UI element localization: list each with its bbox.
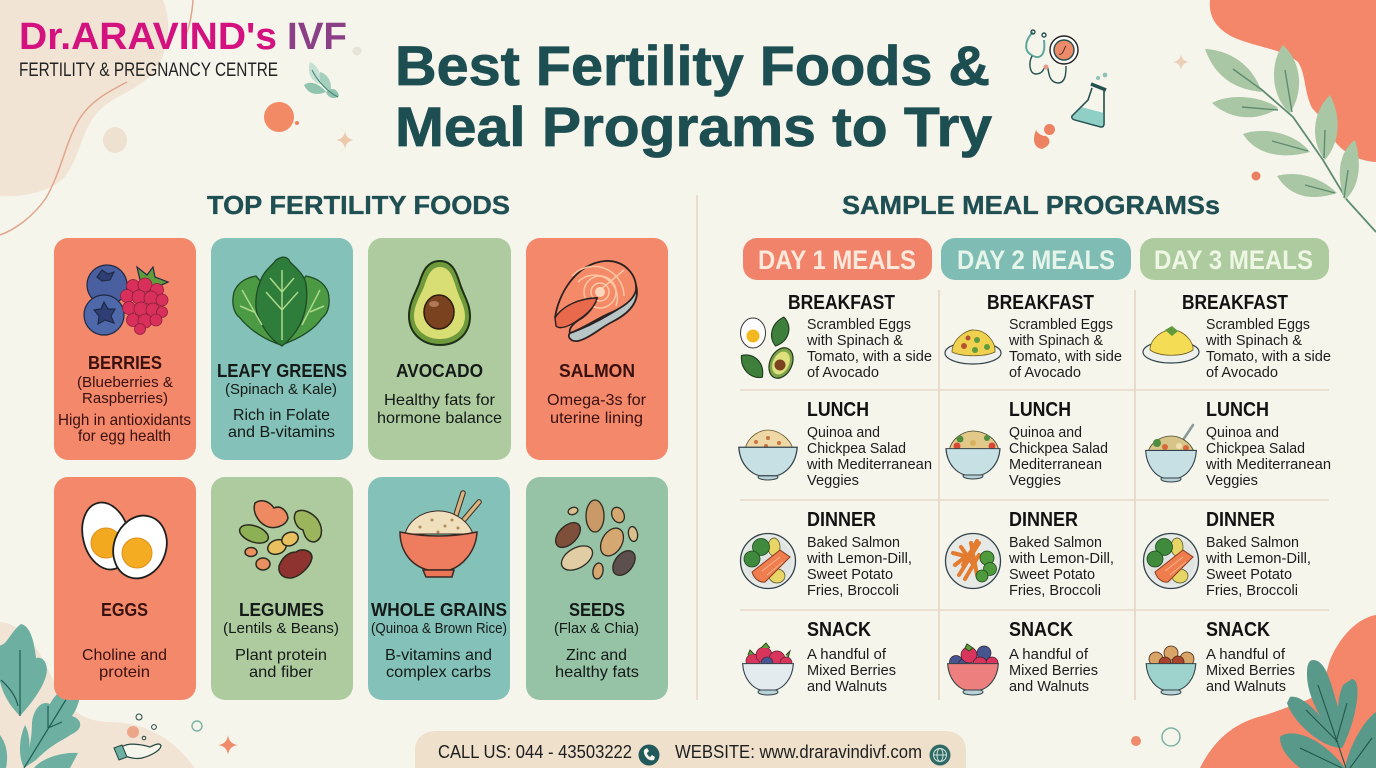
day 2 breakfast: of Avocado bbox=[1009, 364, 1081, 381]
day 3 dinner: DINNER bbox=[1206, 509, 1275, 531]
panel: eggs: EGGS bbox=[101, 599, 148, 620]
day 3 lunch: Chickpea Salad bbox=[1206, 440, 1305, 457]
day 1 dinner: with Lemon-Dill, bbox=[806, 550, 912, 567]
icon: phone bbox=[638, 744, 660, 766]
logo: IVF bbox=[287, 16, 347, 58]
footer contact bar bbox=[415, 731, 966, 768]
day 1 header bbox=[743, 238, 932, 280]
day 2 snack: A handful of bbox=[1009, 646, 1089, 663]
day 2 snack: SNACK bbox=[1009, 619, 1073, 641]
day 2 dinner: with Lemon-Dill, bbox=[1008, 550, 1114, 567]
title: Meal Programs to Try bbox=[395, 95, 992, 158]
day 3 dinner: Fries, Broccoli bbox=[1206, 582, 1298, 599]
day 2 dinner: Fries, Broccoli bbox=[1009, 582, 1101, 599]
panel: eggs bbox=[54, 477, 196, 700]
day 1 lunch: Quinoa and bbox=[807, 424, 880, 441]
logo: FERTILITY & PREGNANCY CENTRE bbox=[19, 60, 278, 81]
panel: berries: (Blueberries & bbox=[77, 374, 173, 391]
day 2 lunch: Quinoa and bbox=[1009, 424, 1082, 441]
day 2 breakfast: BREAKFAST bbox=[987, 292, 1094, 314]
day 1 breakfast: of Avocado bbox=[807, 364, 879, 381]
panel: leafy greens: (Spinach & Kale) bbox=[225, 381, 337, 398]
day 1 dinner: Fries, Broccoli bbox=[807, 582, 899, 599]
day 2 header bbox=[941, 238, 1131, 280]
day 2 lunch: LUNCH bbox=[1009, 399, 1071, 421]
icon: scrambled eggs plate bbox=[1143, 326, 1199, 363]
footer contact bar: WEBSITE: www.draravindivf.com bbox=[675, 742, 922, 762]
title: Best Fertility Foods & bbox=[395, 34, 990, 97]
icon: chickpea salad bowl bbox=[946, 431, 1000, 479]
panel: eggs: protein bbox=[99, 664, 150, 681]
panel: berries: Raspberries) bbox=[82, 390, 168, 407]
heading: sample meal programs: SAMPLE MEAL PROGRAMSs bbox=[842, 190, 1220, 220]
icon: berries bbox=[84, 265, 168, 335]
day 1 dinner: DINNER bbox=[807, 509, 876, 531]
icon: berry bowl bbox=[743, 643, 793, 695]
panel: avocado: hormone balance bbox=[377, 410, 502, 427]
day 2 breakfast: Scrambled Eggs bbox=[1009, 316, 1113, 333]
panel: berries bbox=[54, 238, 196, 460]
logo: Dr.ARAVIND's bbox=[19, 16, 277, 58]
day 3 breakfast: of Avocado bbox=[1206, 364, 1278, 381]
day 2 breakfast: with Spinach & bbox=[1008, 332, 1103, 349]
day 1 breakfast: Tomato, with a side bbox=[807, 348, 932, 365]
icon: coral fruit shapes bbox=[1034, 124, 1055, 149]
day 2 breakfast bbox=[945, 292, 1122, 381]
day 2 snack: and Walnuts bbox=[1009, 678, 1089, 695]
panel: avocado: Healthy fats for bbox=[384, 392, 496, 409]
day 2 header: DAY 2 MEALS bbox=[957, 245, 1115, 275]
day 2 dinner: Sweet Potato bbox=[1009, 566, 1095, 583]
icon: mixed berries red bowl bbox=[948, 644, 998, 695]
day 1 lunch: LUNCH bbox=[807, 399, 869, 421]
day 3 snack: A handful of bbox=[1206, 646, 1286, 663]
day 1 breakfast bbox=[736, 292, 932, 383]
panel: seeds bbox=[526, 477, 668, 700]
panel: salmon bbox=[526, 238, 668, 460]
day 3 snack: Mixed Berries bbox=[1206, 662, 1295, 679]
icon: boiled eggs bbox=[75, 497, 175, 586]
day 1 lunch bbox=[739, 399, 932, 489]
day 3 lunch: with Mediterranean bbox=[1205, 456, 1331, 473]
day 3 header bbox=[1140, 238, 1329, 280]
section divider bbox=[696, 195, 698, 700]
day 3 dinner: with Lemon-Dill, bbox=[1205, 550, 1311, 567]
icon: salmon steak bbox=[555, 261, 637, 341]
day 2 lunch: Mediterranean bbox=[1009, 456, 1102, 473]
panel: seeds: healthy fats bbox=[555, 664, 639, 681]
icon: sweet potato fries plate bbox=[946, 534, 1000, 588]
panel: berries: High in antioxidants bbox=[58, 412, 191, 429]
panel: seeds: (Flax & Chia) bbox=[554, 620, 639, 637]
panel: salmon: SALMON bbox=[559, 360, 635, 381]
panel: berries: for egg health bbox=[78, 428, 171, 445]
icon: seeds bbox=[551, 500, 640, 580]
day 3 header: DAY 3 MEALS bbox=[1154, 245, 1313, 275]
panel: legumes: LEGUMES bbox=[239, 599, 324, 620]
icon: vegetable scramble plate bbox=[945, 330, 1001, 364]
icon: rice bowl bbox=[400, 493, 479, 577]
panel: whole grains: complex carbs bbox=[386, 664, 491, 681]
day 2 lunch bbox=[946, 399, 1108, 489]
icon: egg, spinach and avocado bbox=[736, 315, 798, 383]
panel: salmon: uterine lining bbox=[550, 410, 643, 427]
panel: leafy greens bbox=[211, 238, 353, 460]
day 1 lunch: Chickpea Salad bbox=[807, 440, 906, 457]
panel: avocado: AVOCADO bbox=[396, 360, 483, 381]
panel: seeds: SEEDS bbox=[569, 599, 625, 620]
icon: spinach bbox=[233, 257, 329, 346]
day 1 dinner: Baked Salmon bbox=[807, 534, 900, 551]
icon: salmon plate bbox=[740, 534, 796, 588]
icon: quinoa bowl bbox=[739, 430, 797, 480]
icon: avocado bbox=[409, 261, 470, 345]
panel: legumes: and fiber bbox=[249, 664, 314, 681]
day 3 lunch: LUNCH bbox=[1206, 399, 1269, 421]
day 1 breakfast: with Spinach & bbox=[806, 332, 903, 349]
day 3 snack: SNACK bbox=[1206, 619, 1270, 641]
day 3 breakfast: with Spinach & bbox=[1205, 332, 1302, 349]
day 2 lunch: Chickpea Salad bbox=[1009, 440, 1108, 457]
icon: legumes bbox=[237, 501, 321, 578]
panel: whole grains: B-vitamins and bbox=[385, 647, 492, 664]
title bbox=[395, 34, 992, 158]
icon: salad bowl with spoon bbox=[1146, 425, 1196, 482]
day 3 breakfast: Tomato, with a side bbox=[1206, 348, 1331, 365]
day 2 dinner bbox=[946, 509, 1114, 599]
day 3 lunch bbox=[1146, 399, 1331, 489]
icon: flask bbox=[1072, 73, 1107, 127]
logo bbox=[19, 16, 347, 81]
decoration: bottom-left blob and plant bbox=[0, 622, 238, 768]
icon: salmon plate bbox=[1144, 534, 1198, 588]
day 2 lunch: Veggies bbox=[1009, 472, 1061, 489]
day 3 dinner bbox=[1144, 509, 1311, 599]
panel: whole grains bbox=[368, 477, 510, 700]
day 3 breakfast: BREAKFAST bbox=[1182, 292, 1288, 314]
day 3 breakfast: Scrambled Eggs bbox=[1206, 316, 1310, 333]
panel: avocado bbox=[368, 238, 511, 460]
panel: berries: BERRIES bbox=[88, 352, 162, 373]
icon: globe bbox=[930, 744, 950, 766]
day 3 breakfast bbox=[1143, 292, 1331, 381]
day 3 snack: and Walnuts bbox=[1206, 678, 1286, 695]
day 3 snack bbox=[1146, 619, 1295, 695]
panel: salmon: Omega-3s for bbox=[547, 392, 647, 409]
panel: leafy greens: LEAFY GREENS bbox=[217, 360, 347, 381]
panel: legumes: (Lentils & Beans) bbox=[223, 620, 339, 637]
day 3 lunch: Quinoa and bbox=[1206, 424, 1279, 441]
icon: stethoscope bbox=[1026, 30, 1078, 83]
decoration: top-left blob and accents bbox=[0, 0, 362, 235]
day 1 snack: and Walnuts bbox=[807, 678, 887, 695]
day 1 breakfast: BREAKFAST bbox=[788, 292, 895, 314]
day 2 dinner: Baked Salmon bbox=[1009, 534, 1102, 551]
panel: legumes bbox=[211, 477, 353, 700]
day 1 breakfast: Scrambled Eggs bbox=[807, 316, 911, 333]
panel: leafy greens: and B-vitamins bbox=[228, 424, 335, 441]
day 1 snack: Mixed Berries bbox=[807, 662, 896, 679]
day 2 dinner: DINNER bbox=[1009, 509, 1078, 531]
heading: top fertility foods: TOP FERTILITY FOODS bbox=[207, 190, 510, 220]
day 1 lunch: with Mediterranean bbox=[806, 456, 932, 473]
panel: whole grains: WHOLE GRAINS bbox=[371, 599, 507, 620]
panel: leafy greens: Rich in Folate bbox=[233, 407, 330, 424]
day 1 header: DAY 1 MEALS bbox=[758, 245, 916, 275]
day 2 breakfast: Tomato, with side bbox=[1009, 348, 1122, 365]
panel: legumes: Plant protein bbox=[235, 647, 327, 664]
day 3 lunch: Veggies bbox=[1206, 472, 1258, 489]
panel: seeds: Zinc and bbox=[566, 647, 627, 664]
day 1 lunch: Veggies bbox=[807, 472, 859, 489]
day 1 snack: A handful of bbox=[807, 646, 887, 663]
day 3 dinner: Baked Salmon bbox=[1206, 534, 1299, 551]
day 2 snack: Mixed Berries bbox=[1009, 662, 1098, 679]
day 3 dinner: Sweet Potato bbox=[1206, 566, 1292, 583]
panel: eggs: Choline and bbox=[82, 647, 167, 664]
decoration: top-right blob and branch bbox=[1173, 0, 1376, 232]
day 1 snack: SNACK bbox=[807, 619, 871, 641]
decoration: bottom-right blob and plant bbox=[1131, 615, 1376, 768]
icon: walnut bowl bbox=[1146, 646, 1196, 695]
footer contact bar: CALL US: 044 - 43503222 bbox=[438, 742, 632, 762]
day 1 snack bbox=[743, 619, 896, 695]
panel: whole grains: (Quinoa & Brown Rice) bbox=[371, 620, 507, 637]
day 2 snack bbox=[948, 619, 1098, 695]
day 1 dinner: Sweet Potato bbox=[807, 566, 893, 583]
day 1 dinner bbox=[740, 509, 912, 599]
